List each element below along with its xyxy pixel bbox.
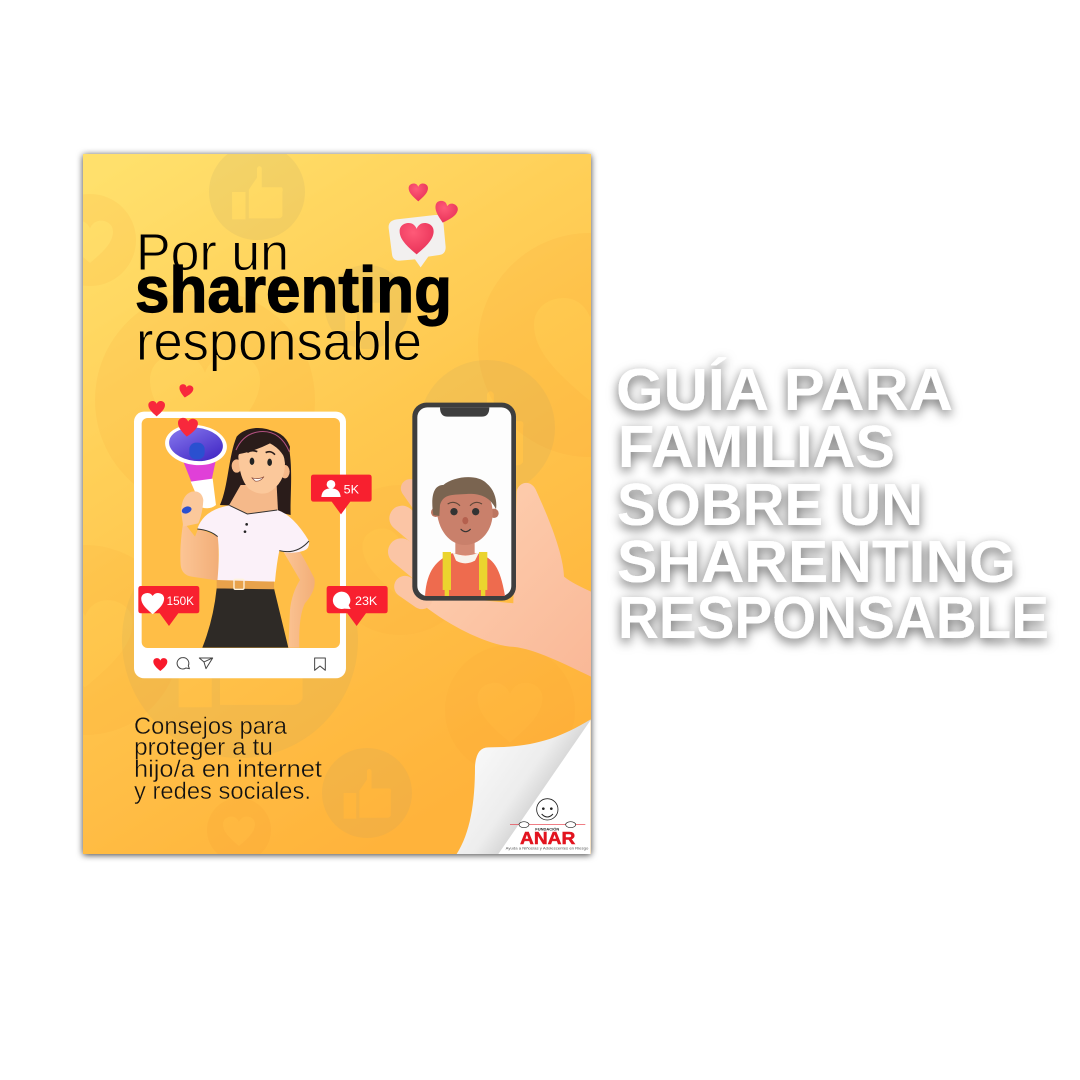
background pattern icons	[122, 154, 588, 852]
title: sharenting	[135, 253, 452, 326]
smartphone	[412, 403, 516, 601]
badge: likes 150K: 150K	[167, 594, 194, 608]
curled corner	[457, 719, 591, 854]
icon row: like, comment, share, save	[153, 658, 325, 671]
heading: guide title: FAMILIAS	[618, 414, 895, 480]
hand	[401, 483, 591, 677]
photo area	[142, 418, 340, 648]
social post frame	[134, 384, 388, 678]
poster background	[83, 154, 591, 854]
subtitle: Consejos para	[134, 713, 288, 740]
woman with megaphone	[163, 422, 315, 648]
badge: comments 23K	[327, 586, 388, 626]
title: responsable	[136, 310, 422, 372]
boy avatar	[425, 477, 505, 596]
badge: followers 5K	[311, 475, 372, 514]
subtitle: y redes sociales.	[134, 778, 311, 805]
floating hearts	[148, 384, 198, 437]
title: Por un	[136, 224, 289, 282]
white frame	[134, 412, 346, 678]
page curl with logo	[457, 719, 591, 854]
logo: Fundación ANAR: FUNDACIÓN	[535, 827, 560, 832]
badge: followers 5K: 5K	[344, 482, 359, 496]
heading: guide title: GUÍA PARA	[616, 357, 953, 423]
subtitle: hijo/a en internet	[134, 756, 322, 783]
subtitle: proteger a tu	[134, 734, 273, 761]
title	[135, 224, 452, 372]
heading: guide title	[616, 357, 1049, 651]
badge: comments 23K: 23K	[355, 594, 377, 608]
logo: Fundación ANAR: ANAR	[520, 828, 576, 848]
icon: chat bubble with hearts	[389, 184, 459, 267]
heading: guide title: SHARENTING	[617, 529, 1016, 595]
logo: Fundación ANAR: Ayuda a Niños/as y Adolescentes en Riesgo	[506, 847, 588, 851]
heading: guide title: RESPONSABLE	[618, 585, 1049, 651]
badge: likes 150K	[138, 586, 199, 626]
hand holding phone	[401, 403, 591, 677]
poster: cover page	[78, 150, 596, 860]
subtitle	[134, 713, 322, 805]
logo: Fundación ANAR	[506, 799, 588, 851]
heading: guide title: SOBRE UN	[617, 472, 923, 538]
megaphone	[183, 459, 216, 484]
